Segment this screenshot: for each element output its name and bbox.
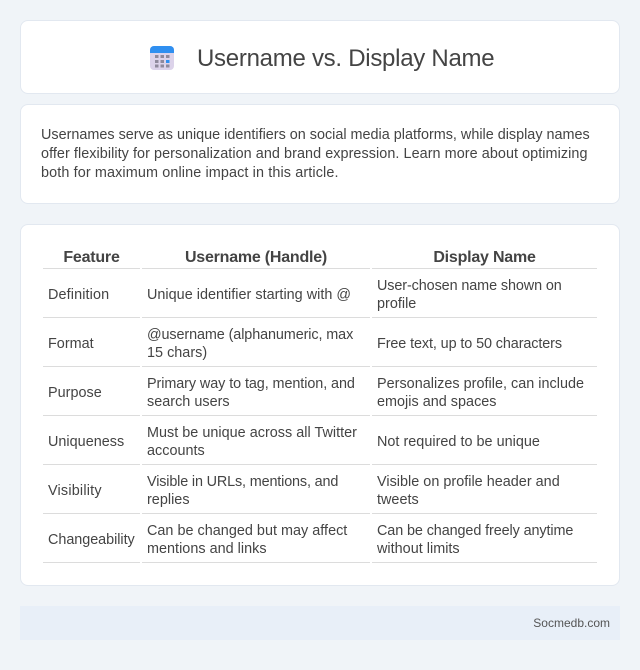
row: Uniqueness: Not required to be unique <box>377 434 540 450</box>
panel: comparison table <box>20 224 620 586</box>
row: Visibility: Visibility <box>48 483 102 499</box>
row: Format: Free text, up to 50 characters <box>377 336 562 352</box>
row: Definition: User-chosen name shown on <box>377 278 562 294</box>
row: Format <box>48 327 562 361</box>
icon: calendar <box>150 46 174 70</box>
row: Visibility: tweets <box>377 492 419 508</box>
row: Purpose: Personalizes profile, can include <box>377 376 584 392</box>
row: Uniqueness: Must be unique across all Twitter <box>147 425 357 441</box>
row: Purpose: emojis and spaces <box>377 394 497 410</box>
row: Changeability: Can be changed but may affect <box>147 523 347 539</box>
table header: Feature <box>63 249 120 266</box>
title: Username vs. Display Name <box>197 45 494 72</box>
intro text: offer flexibility for personalization and brand expression. Learn more about optimizing <box>41 146 588 162</box>
footer <box>20 606 620 640</box>
row: Definition: Unique identifier starting with @ <box>147 287 351 303</box>
row: Purpose <box>48 376 584 410</box>
row: Purpose: search users <box>147 394 230 410</box>
panel: introduction <box>20 104 620 204</box>
row: Visibility <box>48 474 560 508</box>
row: Purpose: Primary way to tag, mention, and <box>147 376 355 392</box>
table header: Username (Handle) <box>185 249 327 266</box>
row: Changeability: Can be changed freely anytime <box>377 523 573 539</box>
row: Visibility: Visible in URLs, mentions, and <box>147 474 338 490</box>
row: Uniqueness: Uniqueness <box>48 434 124 450</box>
panel: title <box>20 20 620 94</box>
row: Changeability: Changeability <box>48 532 135 548</box>
row: Changeability <box>48 523 573 557</box>
row: Definition <box>48 278 562 312</box>
row: Definition: Definition <box>48 287 109 303</box>
intro text: Usernames serve as unique identifiers on social media platforms, while display names <box>41 127 590 143</box>
row: Purpose: Purpose <box>48 385 102 401</box>
row: Visibility: Visible on profile header and <box>377 474 560 490</box>
row: Definition: profile <box>377 296 416 312</box>
table header <box>63 249 536 266</box>
intro text <box>41 127 590 181</box>
footer source text: Socmedb.com <box>533 616 610 630</box>
intro text: both for maximum online impact in this article. <box>41 165 339 181</box>
row: Changeability: mentions and links <box>147 541 267 557</box>
row: Format: @username (alphanumeric, max <box>147 327 353 343</box>
row: Format: 15 chars) <box>147 345 207 361</box>
row: Visibility: replies <box>147 492 190 508</box>
row: Format: Format <box>48 336 94 352</box>
row: Uniqueness: accounts <box>147 443 205 459</box>
row: Changeability: without limits <box>377 541 460 557</box>
row: Uniqueness <box>48 425 540 459</box>
table header: Display Name <box>433 249 536 266</box>
